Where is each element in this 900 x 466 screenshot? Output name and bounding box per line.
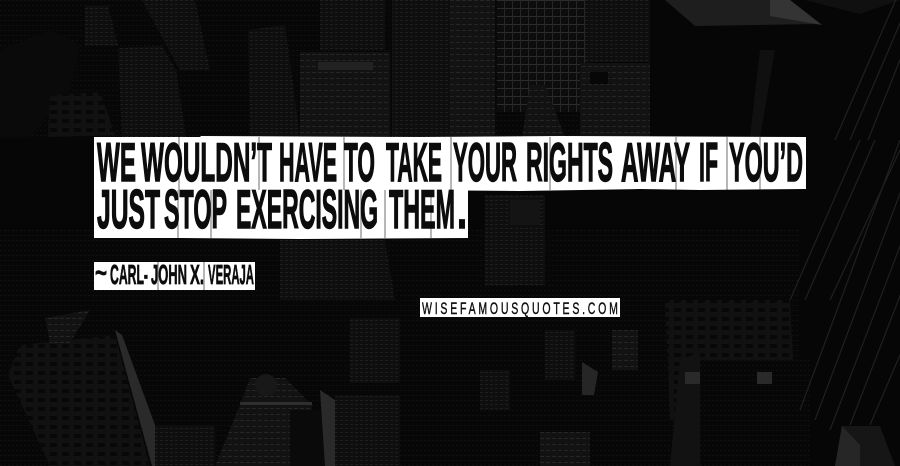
quote text: YOUR — [453, 131, 517, 193]
quote text: JUST — [97, 178, 160, 240]
quote text: . — [457, 178, 467, 240]
quote line 1 strip — [94, 136, 806, 191]
cut marks — [158, 137, 760, 290]
quote text — [97, 131, 803, 240]
quote text: WOULDN’T — [141, 131, 272, 193]
attribution: X. — [190, 259, 204, 290]
attribution — [95, 257, 254, 290]
poster: VERAJA — [208, 259, 254, 290]
watermark: WISEFAMOUSQUOTES.COM — [422, 298, 618, 318]
quote text: TAKE — [386, 131, 442, 193]
attribution: ~ — [95, 257, 107, 288]
quote text: IF — [699, 131, 718, 193]
attribution strip — [94, 262, 255, 290]
watermark strip — [420, 298, 620, 317]
attribution: JOHN — [151, 259, 187, 290]
quote text: HAVE — [279, 131, 337, 193]
quote text: EXERCISING — [236, 178, 378, 240]
quote text: THEM — [389, 178, 455, 240]
right side diagonal tower lines — [790, 0, 900, 430]
poster: YOU’D — [729, 131, 803, 193]
quote line 2 strip — [94, 189, 468, 239]
quote text: AWAY — [621, 131, 690, 193]
quote text: TO — [344, 131, 375, 193]
attribution: CARL- — [110, 259, 148, 290]
quote text: WE — [97, 131, 136, 193]
quote text: RIGHTS — [526, 131, 613, 193]
quote text: STOP — [164, 178, 227, 240]
